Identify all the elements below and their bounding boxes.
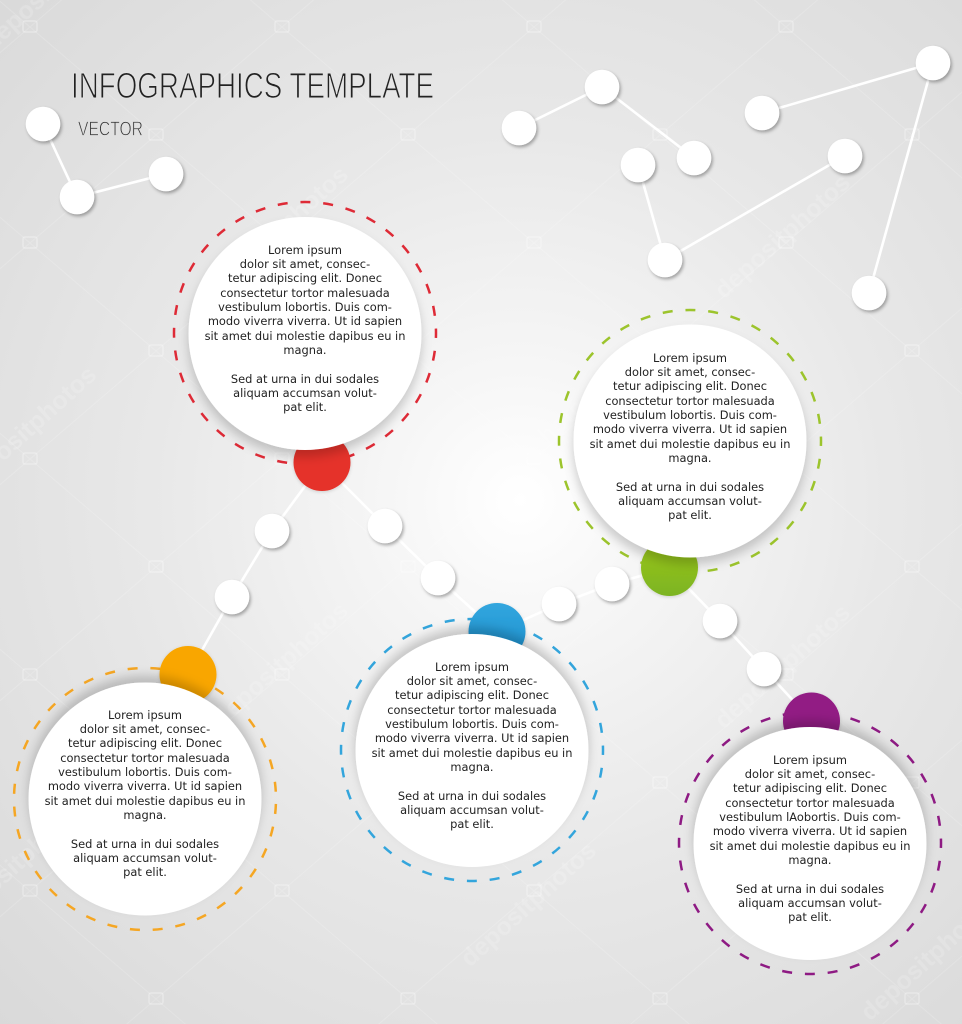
panel: blue: Sed at urna in dui sodales bbox=[398, 789, 546, 803]
panel: orange: aliquam accumsan volut- bbox=[73, 851, 217, 865]
panel: red bbox=[174, 202, 436, 491]
panel: green: modo viverra viverra. Ut id sapien bbox=[593, 422, 787, 436]
panel: orange: tetur adipiscing elit. Donec bbox=[68, 736, 222, 750]
panel: blue: modo viverra viverra. Ut id sapien bbox=[375, 731, 569, 745]
panel: green bbox=[559, 310, 821, 596]
panel: blue: consectetur tortor malesuada bbox=[387, 703, 557, 717]
constellation: centre right bbox=[621, 139, 862, 277]
panel: orange: vestibulum lobortis. Duis com- bbox=[58, 765, 232, 779]
panel: orange: sit amet dui molestie dapibus eu in bbox=[45, 794, 245, 808]
panel: red: pat elit. bbox=[283, 400, 327, 414]
panel: orange bbox=[14, 646, 276, 930]
panel: red: modo viverra viverra. Ut id sapien bbox=[208, 314, 402, 328]
panel: orange: consectetur tortor malesuada bbox=[60, 751, 230, 765]
panel: blue: vestibulum lobortis. Duis com- bbox=[385, 717, 559, 731]
panel: blue: pat elit. bbox=[450, 817, 494, 831]
panel: red: vestibulum lobortis. Duis com- bbox=[218, 300, 392, 314]
panel: purple: vestibulum lAobortis. Duis com- bbox=[719, 810, 901, 824]
panel: purple: consectetur tortor malesuada bbox=[725, 796, 895, 810]
panel: red: tetur adipiscing elit. Donec bbox=[228, 271, 382, 285]
panel: purple: magna. bbox=[788, 853, 832, 867]
panel: green: aliquam accumsan volut- bbox=[618, 494, 762, 508]
panel: orange: pat elit. bbox=[123, 865, 167, 879]
constellation: far right bbox=[745, 46, 950, 310]
panel: purple: modo viverra viverra. Ut id sapien bbox=[713, 824, 907, 838]
panel: red: dolor sit amet, consec- bbox=[240, 257, 370, 271]
constellation: top left bbox=[26, 107, 183, 214]
connector network bbox=[188, 463, 812, 721]
watermarks: depositphotos bbox=[709, 598, 856, 734]
watermarks: depositphotos bbox=[455, 836, 602, 972]
panel: red: aliquam accumsan volut- bbox=[233, 386, 377, 400]
panel: blue: aliquam accumsan volut- bbox=[400, 803, 544, 817]
panel: blue: magna. bbox=[450, 760, 494, 774]
panel: red: Lorem ipsum bbox=[268, 243, 342, 257]
panel: red: magna. bbox=[283, 343, 327, 357]
panel: blue: Lorem ipsum bbox=[435, 660, 509, 674]
panel: orange: Sed at urna in dui sodales bbox=[71, 837, 219, 851]
panel: blue: dolor sit amet, consec- bbox=[407, 674, 537, 688]
subtitle: VECTOR bbox=[78, 118, 143, 140]
watermarks: depositphotos bbox=[207, 160, 354, 296]
panel: blue: sit amet dui molestie dapibus eu in bbox=[372, 746, 572, 760]
panel: orange: modo viverra viverra. Ut id sapien bbox=[48, 779, 242, 793]
panel: red: consectetur tortor malesuada bbox=[220, 286, 390, 300]
panel: green: Lorem ipsum bbox=[653, 351, 727, 365]
panel: purple: Lorem ipsum bbox=[773, 753, 847, 767]
watermarks: depositphotos bbox=[455, 383, 602, 519]
constellation: top centre bbox=[502, 70, 711, 175]
panel: green: vestibulum lobortis. Duis com- bbox=[603, 408, 777, 422]
watermarks: depositphotos bbox=[709, 168, 856, 304]
panel: green: Sed at urna in dui sodales bbox=[616, 480, 764, 494]
panel: blue bbox=[341, 603, 603, 881]
panel: purple: tetur adipiscing elit. Donec bbox=[733, 781, 887, 795]
panel: green: tetur adipiscing elit. Donec bbox=[613, 379, 767, 393]
panel: orange: dolor sit amet, consec- bbox=[80, 722, 210, 736]
panel: purple: dolor sit amet, consec- bbox=[745, 767, 875, 781]
watermarks: depositphotos bbox=[207, 596, 354, 732]
panel: purple bbox=[679, 692, 941, 974]
panel: green: consectetur tortor malesuada bbox=[605, 394, 775, 408]
panel: red: sit amet dui molestie dapibus eu in bbox=[205, 329, 405, 343]
panel: purple: pat elit. bbox=[788, 910, 832, 924]
panel: purple: Sed at urna in dui sodales bbox=[736, 882, 884, 896]
panel: green: dolor sit amet, consec- bbox=[625, 365, 755, 379]
panel: purple: sit amet dui molestie dapibus eu in bbox=[710, 839, 910, 853]
panel: green: pat elit. bbox=[668, 508, 712, 522]
panel: orange: magna. bbox=[123, 808, 167, 822]
panel: purple: aliquam accumsan volut- bbox=[738, 896, 882, 910]
panel: green: magna. bbox=[668, 451, 712, 465]
panel: blue: tetur adipiscing elit. Donec bbox=[395, 688, 549, 702]
title: INFOGRAPHICS TEMPLATE bbox=[71, 65, 434, 106]
panel: red: Sed at urna in dui sodales bbox=[231, 372, 379, 386]
panel: orange: Lorem ipsum bbox=[108, 708, 182, 722]
panel: green: sit amet dui molestie dapibus eu in bbox=[590, 437, 790, 451]
